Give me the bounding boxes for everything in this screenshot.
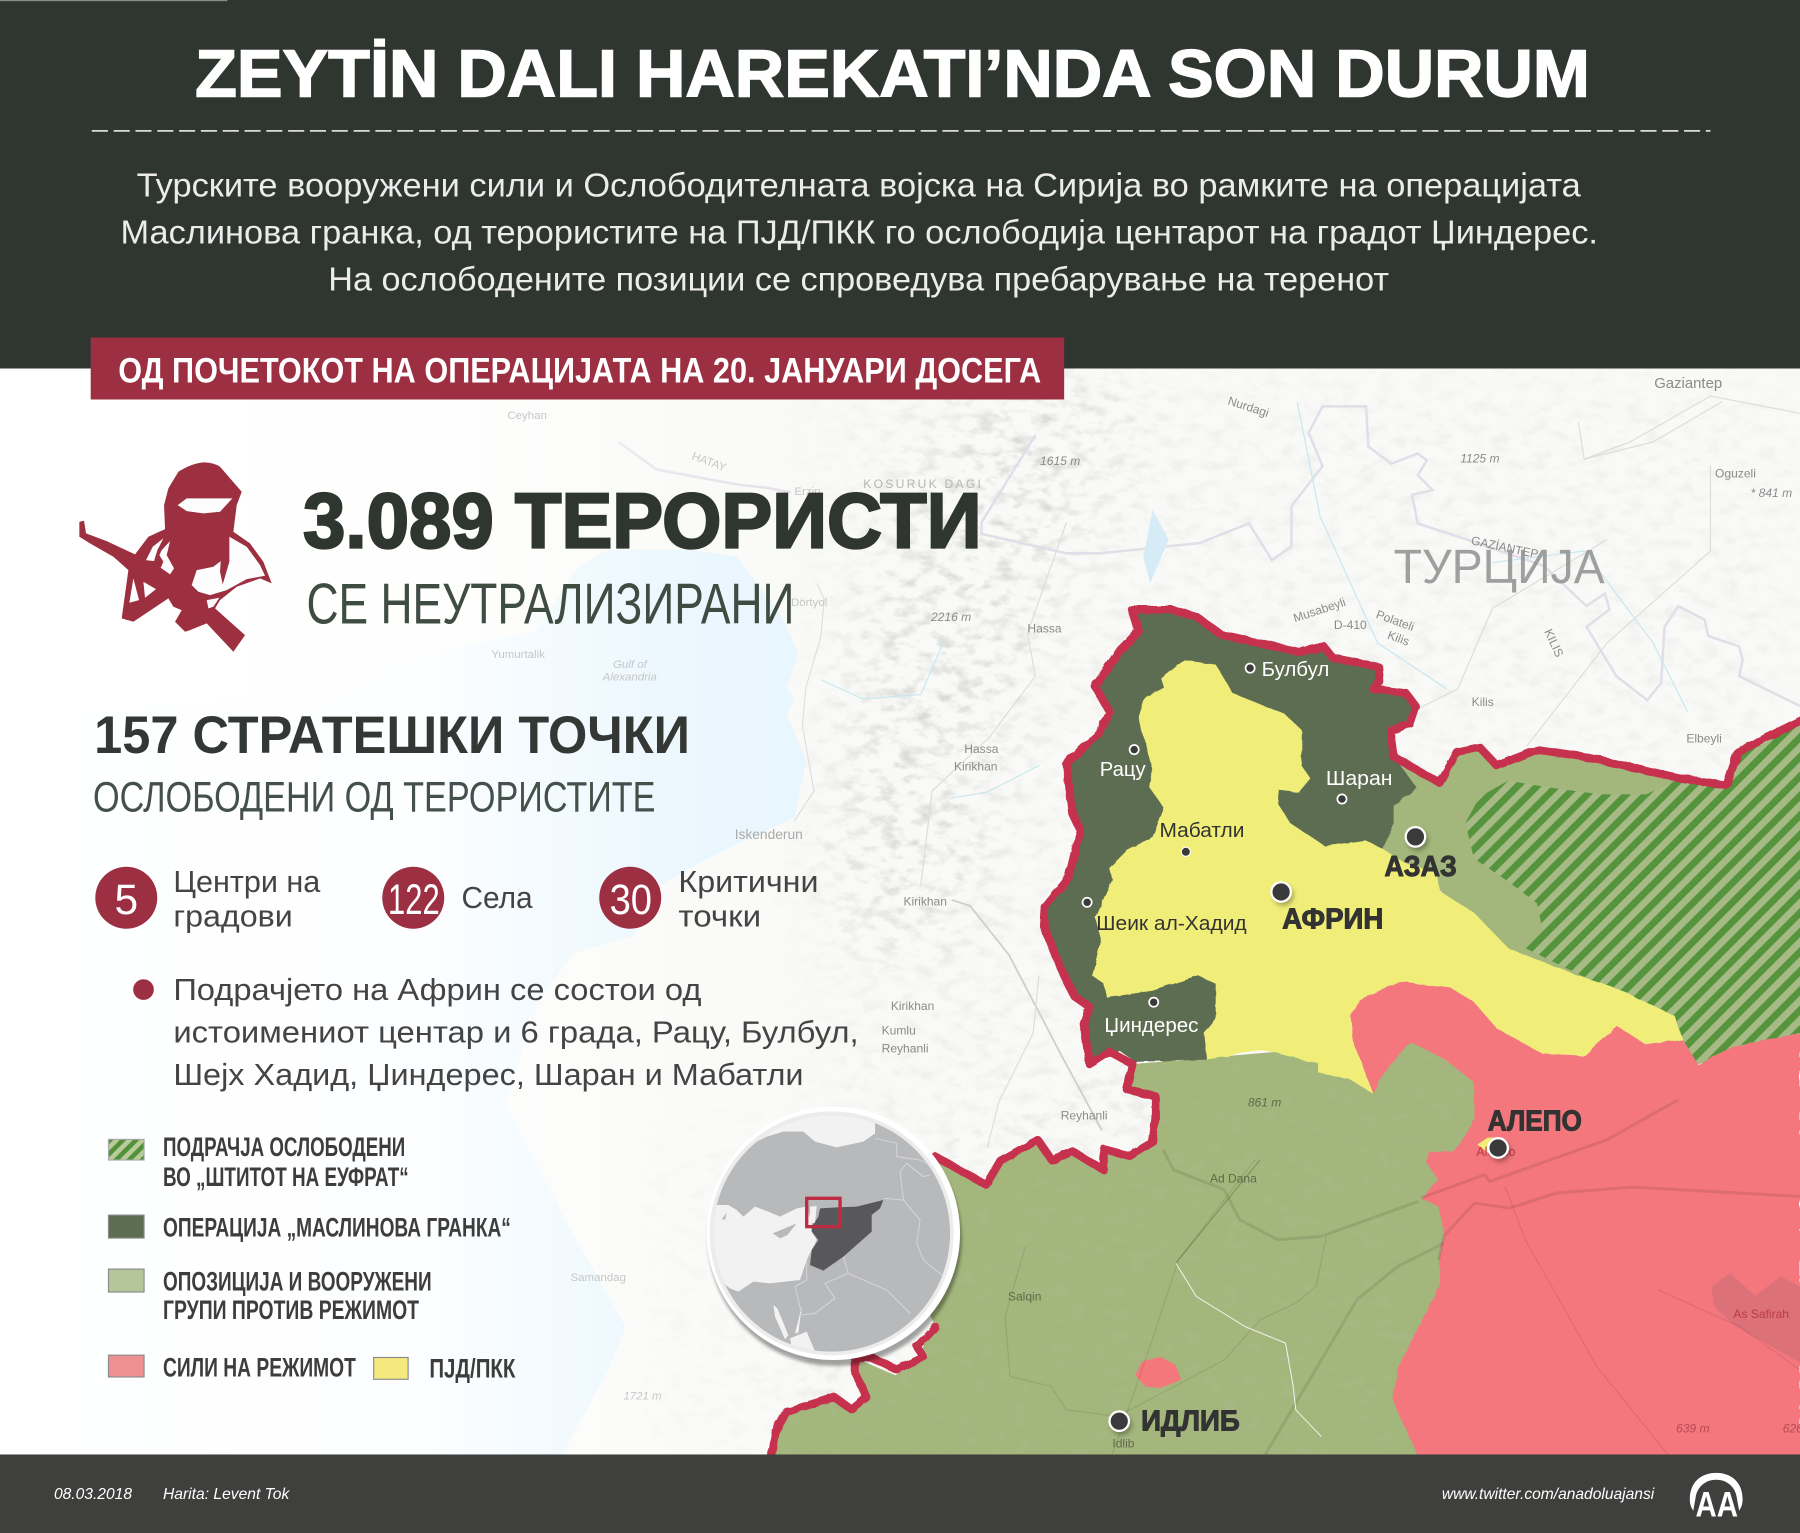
background map place labels: Kirikhan xyxy=(891,999,934,1013)
dashed divider xyxy=(92,130,1710,132)
town: Sheikh al-Hadid: Шеик ал-Хадид xyxy=(1096,912,1247,935)
region: Olive Branch operation xyxy=(1043,610,1417,1064)
background map place labels: Musabeyli xyxy=(1291,595,1347,625)
region: As Safirah lake tint xyxy=(1712,1273,1800,1363)
city: Idlib: ИДЛИБ xyxy=(1141,1405,1240,1437)
background map place labels: Kilis xyxy=(1472,695,1494,709)
map regions xyxy=(771,610,1800,1456)
background map place labels: Erzin xyxy=(794,486,821,498)
legend item: PYD/PKK: ПЈД/ПКК xyxy=(429,1354,516,1384)
map regions: Salqin xyxy=(1008,1290,1041,1304)
bullet text about Afrin: Шејх Хадид, Џиндерес, Шаран и Мабатли xyxy=(173,1057,804,1092)
background map place labels: 1125 m xyxy=(1460,452,1500,466)
city: Afrin xyxy=(1271,882,1383,936)
background map place labels: 2216 m xyxy=(930,610,971,624)
roads on the occupied area xyxy=(1005,1100,1800,1455)
stat: city centres xyxy=(95,864,321,933)
region: regime pocket near Idlib xyxy=(1135,1357,1181,1388)
background map place labels: Alexandria xyxy=(602,672,657,684)
stat: critical points: точки xyxy=(678,898,761,933)
town labels on map xyxy=(1083,540,1606,1437)
heading: strategic points: 157 СТРАТЕШКИ ТОЧКИ xyxy=(94,706,690,765)
town: Sharan xyxy=(1326,767,1392,804)
legend item: regime: СИЛИ НА РЕЖИМОТ xyxy=(163,1352,356,1382)
labels inside occupied area: Ad Dana xyxy=(1210,1171,1257,1185)
background map place labels: * 841 m xyxy=(1751,486,1792,500)
background map place labels: Hassa xyxy=(1027,622,1062,636)
background map place labels: Nurdagi xyxy=(1226,394,1271,420)
terrain shading on opposition area xyxy=(771,1033,1483,1456)
border line xyxy=(771,610,1800,1456)
background map place labels: Kirikhan xyxy=(903,895,947,909)
legend item: regime xyxy=(108,1352,356,1382)
map background xyxy=(503,368,1800,1454)
bullet text about Afrin: истоимениот центар и 6 града, Рацу, Булбул, xyxy=(173,1014,859,1049)
logo: Anadolu Agency: AA xyxy=(1696,1484,1738,1524)
region: opposition held area xyxy=(771,1033,1492,1456)
stat: villages: 122 xyxy=(388,876,440,923)
map regions: As Safirah xyxy=(1733,1307,1789,1321)
background map place labels: Reyhanli xyxy=(1061,1108,1108,1122)
region: regime forces xyxy=(1351,982,1800,1456)
background map place labels: 1721 m xyxy=(623,1390,662,1402)
footer: 08.03.2018 xyxy=(54,1485,132,1503)
map regions: Aleppo xyxy=(1476,1145,1516,1159)
background map place labels: Oguzeli xyxy=(1715,467,1756,481)
background map place labels: Samandag xyxy=(571,1272,626,1284)
stat: critical points: 30 xyxy=(610,876,652,923)
red banner xyxy=(91,338,1064,399)
locator globe xyxy=(707,1107,962,1366)
background map place labels: Kumlu xyxy=(882,1023,916,1037)
map regions: 639 m xyxy=(1676,1422,1710,1436)
town: Mabatli: Мабатли xyxy=(1159,819,1244,842)
background map place labels: Iskenderun xyxy=(735,827,803,842)
city: Azaz: АЗАЗ xyxy=(1384,851,1457,883)
logo: Anadolu Agency xyxy=(1690,1473,1743,1524)
town: Bulbul: Булбул xyxy=(1262,658,1329,681)
header band xyxy=(0,0,1800,369)
background map place labels: KOSURUK DAGI xyxy=(863,477,983,491)
legend item: opposition: ОПОЗИЦИЈА И ВООРУЖЕНИ xyxy=(163,1266,432,1296)
background map place labels: 1615 m xyxy=(1040,454,1080,468)
stat: critical points xyxy=(599,864,818,933)
town: Sharan: Шаран xyxy=(1326,767,1392,790)
stat: villages: Села xyxy=(461,880,533,915)
icon: armed militant xyxy=(79,462,272,652)
heading: strategic points: ОСЛОБОДЕНИ ОД ТЕРОРИСТИТЕ xyxy=(93,774,655,821)
legend item: opposition xyxy=(108,1266,432,1325)
country label: Turkey: ТУРЦИЈА xyxy=(1394,540,1606,594)
legend item: Euphrates Shield: ВО „ШТИТОТ НА ЕУФРАТ“ xyxy=(163,1162,409,1192)
title: ZEYTİN DALI HAREKATI’NDA SON DURUM xyxy=(195,37,1590,111)
background map place labels: D-410 xyxy=(1334,618,1367,632)
legend item: Olive Branch: ОПЕРАЦИЈА „МАСЛИНОВА ГРАНКА“ xyxy=(163,1212,511,1242)
background map place labels: Elbeyli xyxy=(1686,732,1722,746)
background map place labels: HATAY xyxy=(690,451,728,474)
map regions: 861 m xyxy=(1248,1096,1281,1110)
legend item: Euphrates Shield: ПОДРАЧЈА ОСЛОБОДЕНИ xyxy=(163,1132,405,1162)
footer: Harita: Levent Tok xyxy=(163,1485,290,1503)
background map place labels: KILIS xyxy=(1541,627,1566,659)
stat: critical points: Критични xyxy=(678,864,818,899)
footer: www.twitter.com/anadoluajansi xyxy=(1442,1485,1655,1503)
town: Racu xyxy=(1100,745,1146,781)
region: Aleppo yellow spot xyxy=(1477,1138,1502,1155)
background map place labels: Kirikhan xyxy=(954,759,997,773)
background map place labels xyxy=(491,375,1792,1402)
background map place labels: Hassa xyxy=(964,742,999,756)
intro paragraph: На ослободените позиции се спроведува пребарување на теренот xyxy=(328,261,1389,298)
headline: terrorists neutralized: 3.089 ТЕРОРИСТИ xyxy=(303,477,982,565)
bullet text about Afrin: Подрачјето на Африн се состои од xyxy=(173,972,701,1007)
intro paragraph xyxy=(121,167,1598,298)
legend item: Euphrates Shield xyxy=(108,1132,409,1192)
town: Jinderes xyxy=(1104,998,1198,1037)
headline: terrorists neutralized: СЕ НЕУТРАЛИЗИРАНИ xyxy=(307,572,794,636)
red banner: ОД ПОЧЕТОКОТ НА ОПЕРАЦИЈАТА НА 20. ЈАНУАРИ ДОСЕГА xyxy=(118,350,1041,390)
town: Sheikh al-Hadid xyxy=(1083,898,1247,935)
city: Azaz xyxy=(1384,827,1457,883)
legend item: Olive Branch xyxy=(108,1212,511,1242)
stat: villages xyxy=(382,867,533,929)
legend item: opposition: ГРУПИ ПРОТИВ РЕЖИМОТ xyxy=(163,1295,419,1325)
map regions: Idlib xyxy=(1112,1437,1135,1451)
legend item: PYD/PKK xyxy=(374,1354,516,1384)
city: Afrin: АФРИН xyxy=(1282,904,1383,936)
town: Racu: Рацу xyxy=(1100,758,1146,781)
background map place labels: Ceyhan xyxy=(507,410,547,422)
city: Aleppo xyxy=(1488,1106,1582,1162)
intro paragraph: Турските вооружени сили и Ослободителната војска на Сирија во рамките на операцијата xyxy=(137,167,1581,204)
heading: strategic points xyxy=(93,706,690,821)
background map place labels: Kilis xyxy=(1386,628,1411,649)
legend xyxy=(108,1132,516,1384)
bullet text about Afrin xyxy=(133,972,859,1092)
background map place labels: Polateli xyxy=(1374,607,1416,634)
region: Euphrates Shield hatched xyxy=(1465,721,1800,1064)
region: opposition band near Azaz xyxy=(1382,721,1800,1064)
intro paragraph: Маслинова гранка, од терористите на ПЈД/ПКК го ослободија центарот на градот Џиндерес. xyxy=(121,214,1598,251)
city: Aleppo: АЛЕПО xyxy=(1488,1106,1582,1138)
footer xyxy=(0,1454,1800,1533)
town: Mabatli xyxy=(1159,819,1244,856)
town: Jinderes: Џиндерес xyxy=(1104,1014,1198,1037)
background map place labels: Gulf of xyxy=(613,659,649,671)
stat: city centres: градови xyxy=(173,898,293,933)
region: PYD/PKK xyxy=(1092,660,1683,1094)
background map place labels: Gaziantep xyxy=(1654,375,1722,392)
stat: city centres: 5 xyxy=(114,876,138,923)
headline: terrorists neutralized xyxy=(303,477,982,636)
stat: city centres: Центри на xyxy=(173,864,321,899)
background map place labels: Reyhanli xyxy=(882,1042,929,1056)
background map place labels: Yumurtalik xyxy=(491,649,545,661)
background map place labels: GAZİANTEP xyxy=(1470,533,1540,561)
background map place labels: Dörtyol xyxy=(791,597,827,609)
